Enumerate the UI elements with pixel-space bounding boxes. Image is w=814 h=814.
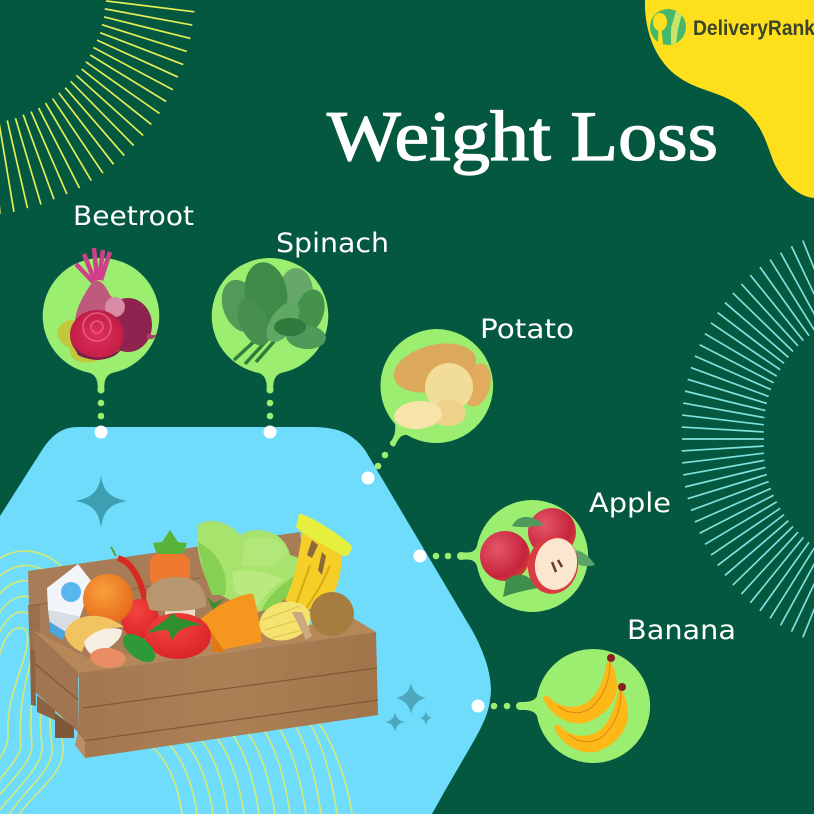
crate rim bbox=[33, 618, 376, 673]
icon: apple bbox=[480, 508, 595, 598]
connector node bbox=[94, 426, 108, 438]
bananas in crate bbox=[285, 514, 352, 612]
green jalapeno bbox=[118, 628, 160, 668]
label: Banana: Banana bbox=[627, 615, 736, 646]
big mushroom bbox=[146, 577, 206, 620]
item: spinach bbox=[212, 228, 389, 438]
orange bell pepper bbox=[200, 594, 262, 652]
spinach circle with pointer bbox=[212, 258, 328, 394]
right teal radial lines bbox=[682, 241, 814, 637]
label: Apple: Apple bbox=[589, 488, 671, 519]
top-left yellow radial lines bbox=[0, 0, 195, 216]
connector dots bbox=[375, 452, 388, 469]
label: Beetroot: Beetroot bbox=[73, 201, 194, 232]
crate back boards bbox=[28, 532, 312, 690]
yellow corner blob bbox=[645, 0, 814, 198]
beetroot circle with pointer bbox=[43, 258, 159, 394]
icon: potato bbox=[389, 336, 495, 431]
logo: DeliveryRank bbox=[650, 9, 814, 45]
label: Potato: Potato bbox=[480, 314, 574, 345]
crate front bbox=[75, 632, 378, 758]
logo icon bbox=[650, 9, 686, 45]
orange bbox=[83, 574, 133, 624]
stars: small sparkles bbox=[385, 683, 432, 732]
tomato bbox=[145, 613, 211, 659]
icon: bananas bbox=[543, 654, 628, 752]
banana circle with pointer bbox=[516, 649, 650, 763]
milk carton bbox=[47, 564, 92, 640]
connector dots bbox=[491, 703, 510, 709]
contour lines on panel: bottom bbox=[150, 714, 352, 814]
connector dots bbox=[433, 553, 451, 559]
connector node bbox=[414, 550, 426, 562]
label: Spinach: Spinach bbox=[276, 228, 389, 259]
lettuce bbox=[197, 521, 309, 612]
chili pepper bbox=[111, 547, 159, 639]
banana one bbox=[543, 654, 617, 723]
contour lines on panel: bottom-left bbox=[0, 551, 71, 814]
icon: beetroot bbox=[58, 248, 158, 363]
crate left side bbox=[30, 630, 78, 738]
star: large sparkle bbox=[75, 475, 127, 528]
corn bbox=[255, 596, 315, 646]
connector node bbox=[472, 700, 484, 712]
connector dots bbox=[98, 400, 104, 419]
item: apple bbox=[414, 488, 671, 612]
carrot bbox=[150, 530, 190, 586]
title: Weight Loss bbox=[327, 98, 718, 176]
potato circle with pointer bbox=[380, 329, 493, 446]
crate of vegetables bbox=[28, 514, 378, 758]
potato bbox=[310, 592, 354, 636]
banana two bbox=[554, 683, 628, 752]
connector node bbox=[264, 426, 276, 438]
connector dots bbox=[267, 400, 273, 419]
icon: spinach bbox=[215, 259, 329, 364]
blue hexagon panel bbox=[0, 427, 491, 814]
connector node bbox=[362, 472, 374, 484]
item: beetroot bbox=[43, 201, 194, 438]
item: banana bbox=[472, 615, 736, 763]
apple circle with pointer bbox=[457, 500, 588, 612]
item: potato bbox=[362, 314, 574, 484]
left mushroom bbox=[65, 616, 127, 670]
